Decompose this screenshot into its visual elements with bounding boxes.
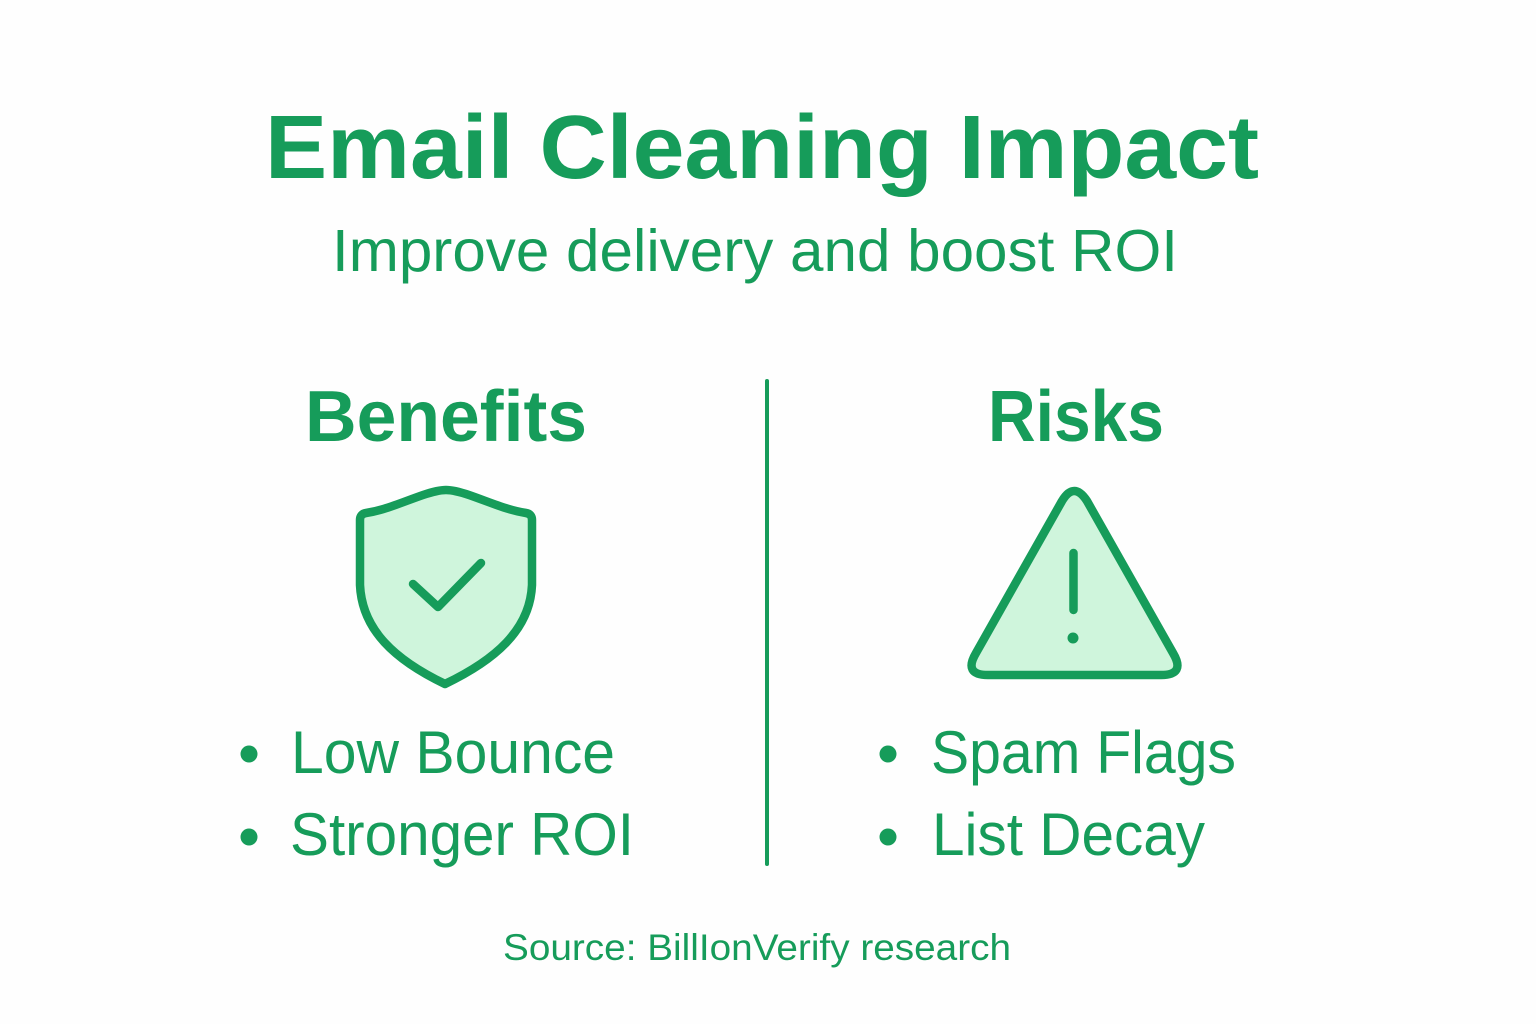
icon: warning triangle	[972, 491, 1177, 675]
bullet item: list decay: List Decay	[932, 801, 1205, 868]
list: risks	[880, 719, 1236, 868]
icon: shield with check mark	[360, 490, 532, 684]
title: Email Cleaning Impact	[265, 98, 1259, 198]
heading: benefits: Benefits	[305, 377, 587, 457]
subtitle: Improve delivery and boost ROI	[332, 218, 1178, 284]
panel: risks	[880, 377, 1236, 868]
panel: benefits	[240, 377, 634, 868]
source note: Source: BillIonVerify research	[503, 927, 1011, 968]
bullet item: stronger roi: Stronger ROI	[290, 801, 634, 868]
bullet item: low bounce: Low Bounce	[291, 719, 615, 786]
list: benefits	[240, 719, 634, 868]
bullet item: spam flags: Spam Flags	[931, 719, 1236, 786]
heading: risks: Risks	[988, 377, 1164, 457]
